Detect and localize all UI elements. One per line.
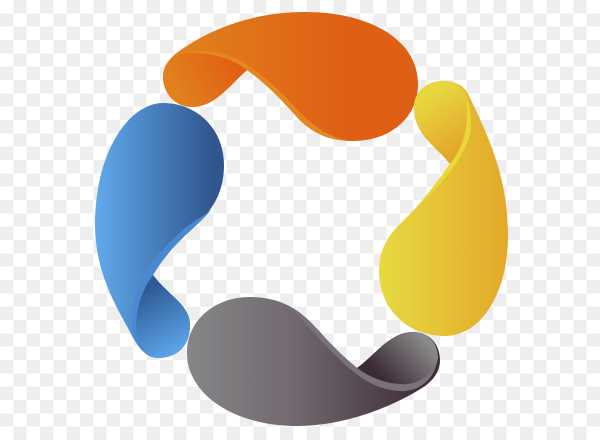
yellow fold highlight [402, 95, 471, 222]
grey fold highlight [285, 305, 437, 391]
grey body [187, 297, 440, 426]
orange inner flap [163, 51, 247, 107]
grey swirl segment [187, 297, 440, 426]
orange swirl segment [163, 12, 418, 141]
blue swirl segment [95, 103, 224, 358]
blue body [95, 103, 224, 358]
orange body [163, 12, 418, 141]
blue fold highlight [132, 208, 213, 352]
grey inner flap [357, 332, 438, 385]
yellow inner flap [414, 81, 468, 164]
orange fold highlight [178, 51, 353, 141]
yellow swirl segment [379, 81, 508, 336]
blue inner flap [136, 275, 190, 358]
yellow body [379, 81, 508, 336]
